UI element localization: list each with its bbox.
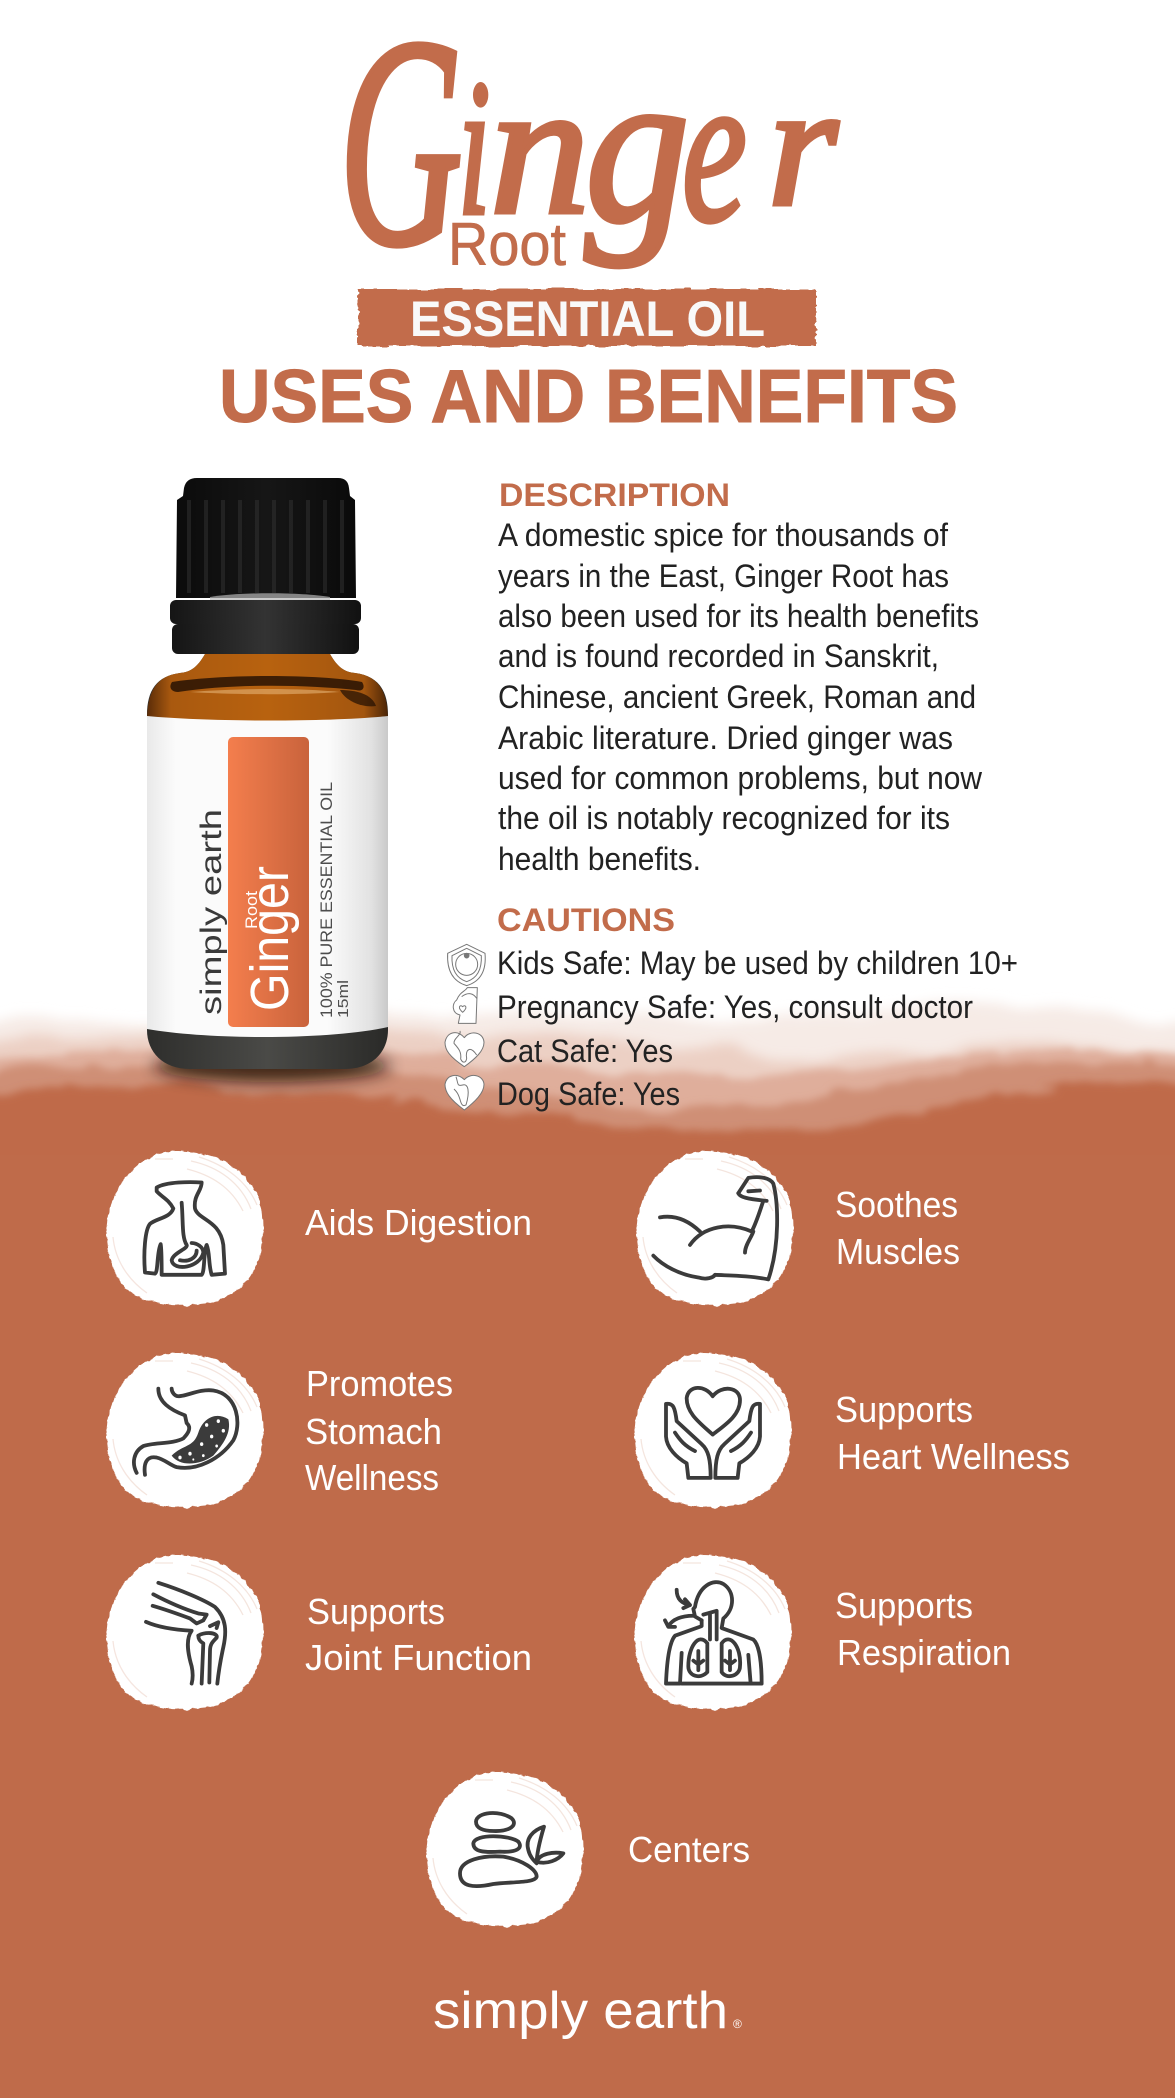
- benefit: supports respiration: Respiration: [837, 1632, 1011, 1673]
- background wash: terracotta watercolor: [0, 1006, 1175, 2098]
- description text: Chinese, ancient Greek, Roman and: [498, 679, 976, 715]
- benefit: supports respiration: Supports: [835, 1585, 973, 1626]
- product bottle: 100% PURE ESSENTIAL OIL: [317, 782, 336, 1018]
- title: Ginger script: r: [768, 48, 837, 242]
- description text: years in the East, Ginger Root has: [498, 558, 949, 594]
- description text: Arabic literature. Dried ginger was: [498, 720, 953, 756]
- benefit: aids digestion: [107, 1151, 532, 1305]
- benefit: supports joint function: Joint Function: [305, 1637, 532, 1678]
- heading: cautions: CAUTIONS: [497, 902, 675, 938]
- title: Ginger script: n: [490, 44, 590, 254]
- benefit: promotes stomach wellness: [107, 1353, 453, 1507]
- cautions list: Dog Safe: Yes: [497, 1076, 680, 1112]
- benefit: promotes stomach wellness: Promotes: [306, 1363, 453, 1404]
- benefit: promotes stomach wellness: Wellness: [305, 1457, 439, 1498]
- description text: and is found recorded in Sanskrit,: [498, 638, 939, 674]
- benefit: supports joint function: [107, 1555, 532, 1709]
- benefit: soothes muscles: [637, 1151, 960, 1305]
- subtitle: Root: Root: [448, 211, 566, 278]
- icon: dog safe heart: [445, 1075, 484, 1110]
- benefit: centers: Centers: [628, 1829, 750, 1870]
- heading: description: DESCRIPTION: [499, 477, 730, 513]
- logo: simply earth: ®: [733, 2017, 742, 2031]
- cautions list: Pregnancy Safe: Yes, consult doctor: [497, 989, 973, 1025]
- benefit: soothes muscles: Muscles: [836, 1231, 960, 1272]
- description text: A domestic spice for thousands of: [498, 517, 948, 553]
- product bottle: [147, 478, 390, 1082]
- cautions list: Cat Safe: Yes: [497, 1033, 673, 1069]
- benefit: aids digestion: Aids Digestion: [305, 1202, 532, 1243]
- description text: the oil is notably recognized for its: [498, 800, 950, 836]
- icon: kids safe shield: [448, 944, 485, 986]
- benefit: supports heart wellness: Supports: [835, 1389, 973, 1430]
- description text: health benefits.: [498, 841, 701, 877]
- benefit: supports heart wellness: Heart Wellness: [837, 1436, 1070, 1477]
- benefit: supports joint function: Supports: [307, 1591, 445, 1632]
- product bottle: 15ml: [335, 980, 352, 1018]
- product bottle: simply earth: [195, 809, 228, 1015]
- icon: cat safe heart: [445, 1031, 484, 1067]
- title: Ginger script: g: [585, 24, 690, 268]
- description text: [498, 517, 983, 877]
- product bottle: Root: [242, 891, 261, 929]
- title: Ginger script: e: [682, 28, 747, 267]
- benefit: supports respiration: [635, 1555, 1011, 1709]
- description text: used for common problems, but now: [498, 760, 983, 796]
- cautions list: [497, 945, 1018, 1112]
- description text: also been used for its health benefits: [498, 598, 979, 634]
- cautions list: Kids Safe: May be used by children 10+: [497, 945, 1018, 981]
- title: Ginger script: i: [458, 40, 490, 255]
- benefit: promotes stomach wellness: Stomach: [305, 1411, 442, 1452]
- brush banner: essential oil: ESSENTIAL OIL: [410, 291, 765, 347]
- heading: uses and benefits: USES AND BENEFITS: [219, 354, 958, 438]
- icon: pregnancy safe: [453, 988, 477, 1023]
- benefit: soothes muscles: Soothes: [835, 1184, 958, 1225]
- benefit: supports heart wellness: [635, 1353, 1070, 1507]
- benefit: centers: [427, 1772, 750, 1926]
- title: Ginger script: [339, 0, 841, 308]
- product bottle: Ginger: [240, 866, 300, 1011]
- logo: simply earth: simply earth: [433, 1982, 728, 2040]
